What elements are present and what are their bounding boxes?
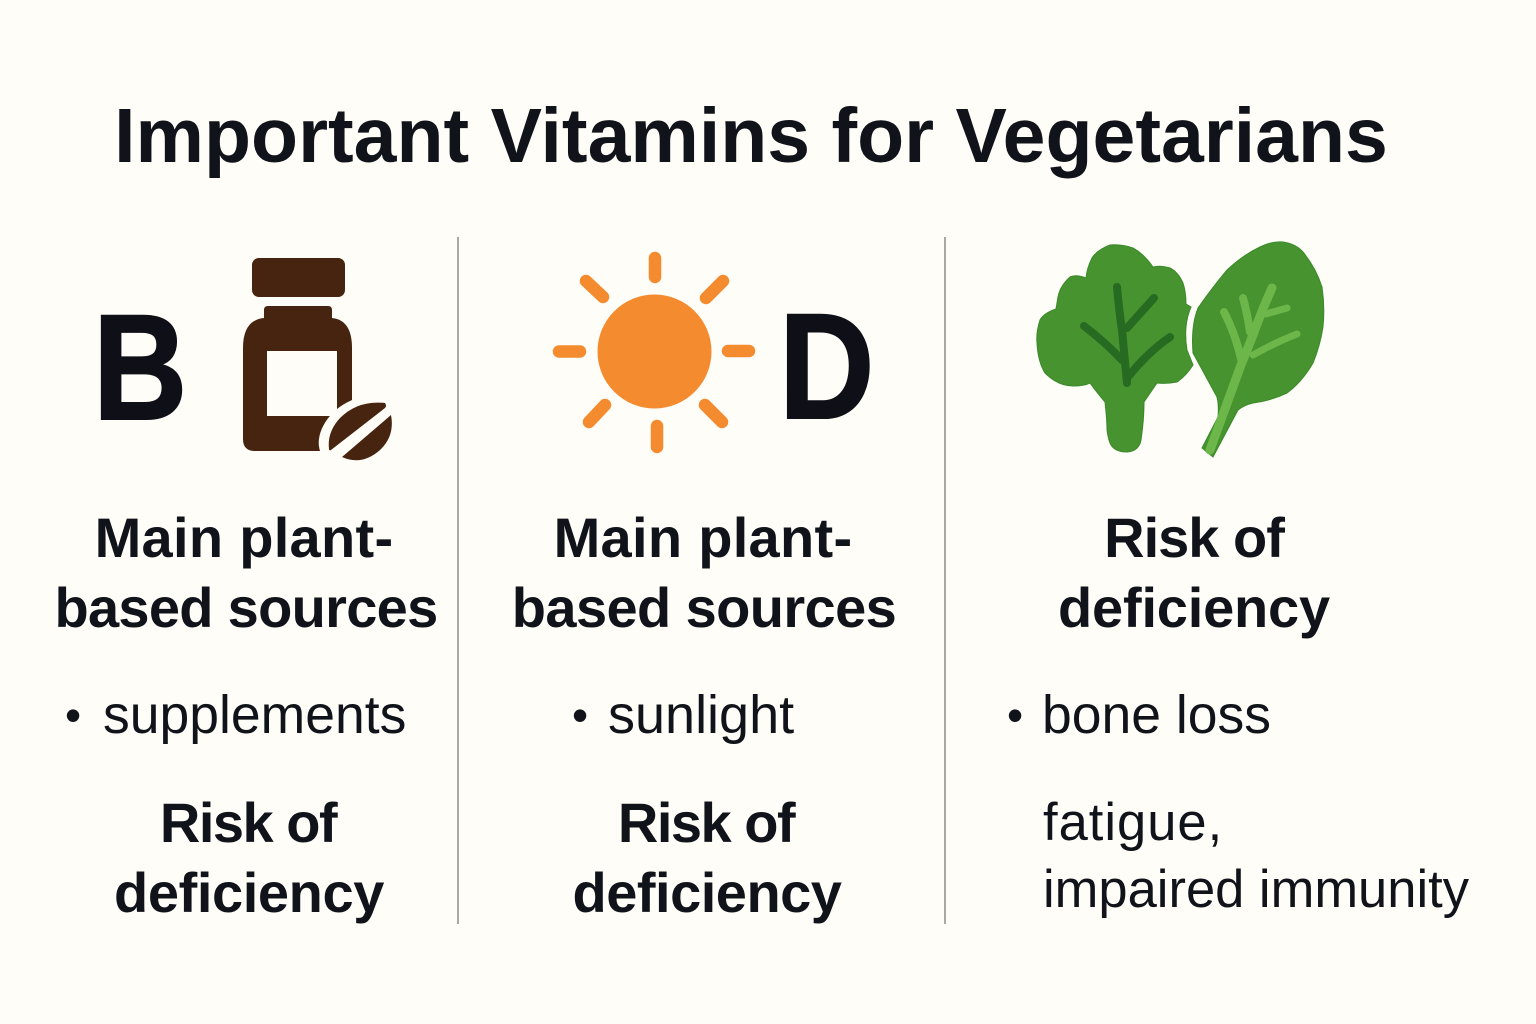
text: fatigue, impaired immunity	[1043, 793, 1469, 919]
heading: sources: based sources	[54, 576, 438, 639]
panel: leafy greens	[1007, 241, 1469, 919]
heading: risk	[1058, 506, 1330, 639]
letter B: B	[93, 283, 187, 451]
bullet dot: •	[65, 689, 81, 741]
bullet dot: •	[572, 689, 588, 741]
heading: risk: Risk of	[618, 791, 794, 854]
heading: risk: deficiency	[573, 861, 841, 924]
heading: risk	[114, 791, 384, 924]
panel: vitamin D	[512, 252, 896, 924]
heading: risk: deficiency	[114, 861, 384, 924]
heading: sources: based sources	[512, 576, 896, 639]
title: Important Vitamins for Vegetarians	[114, 93, 1388, 179]
bullet dot: •	[1007, 689, 1023, 741]
icon: leafy greens	[1036, 241, 1324, 458]
heading: sources	[512, 506, 896, 639]
heading: risk: deficiency	[1058, 576, 1330, 639]
bullet: bone loss: bone loss	[1042, 686, 1271, 745]
icon: sun	[552, 252, 756, 454]
heading: sources	[54, 506, 438, 639]
letter D: D	[779, 282, 874, 450]
icon: supplement bottle	[243, 258, 392, 460]
text: fatigue, impaired immunity: fatigue,	[1043, 793, 1223, 852]
text: fatigue, impaired immunity: impaired immunity	[1043, 860, 1469, 919]
heading: sources: Main plant-	[554, 506, 852, 569]
bullet: sunlight: sunlight	[608, 685, 794, 745]
bullet: supplements: supplements	[103, 686, 406, 745]
heading: risk	[573, 791, 842, 924]
heading: risk: Risk of	[160, 791, 336, 854]
heading: risk: Risk of	[1104, 506, 1284, 569]
heading: sources: Main plant-	[95, 506, 393, 569]
panel: vitamin B	[54, 258, 438, 924]
